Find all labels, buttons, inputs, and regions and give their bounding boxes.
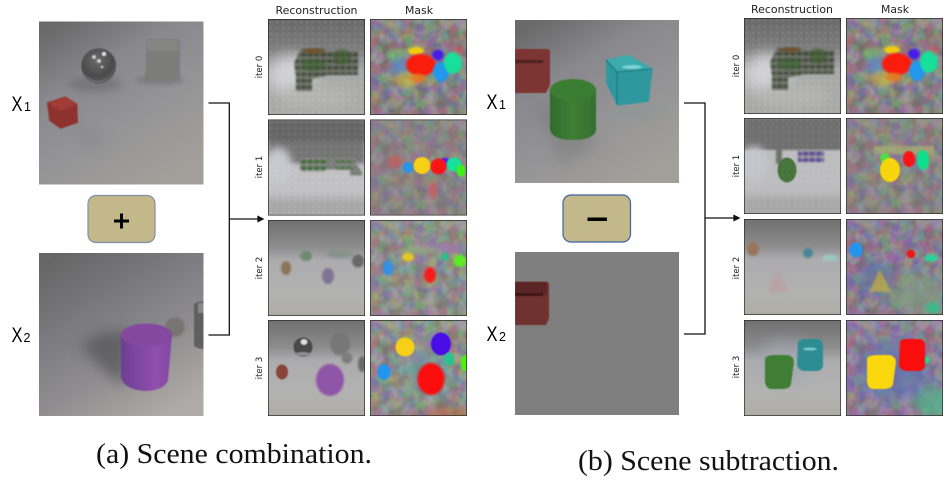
label: iter 1: iter 1	[255, 156, 265, 178]
label: X1: 1	[24, 100, 31, 114]
mask: iter 1	[846, 118, 943, 214]
label: X1: X	[12, 93, 22, 116]
image: X2 scene with purple cylinder	[39, 253, 204, 416]
heading: Mask column: Mask	[881, 4, 910, 16]
arrow: bracket combining X1 and X2 into iterations	[684, 103, 739, 334]
reconstruction: iter 0	[268, 19, 365, 115]
operator: minus button	[563, 195, 630, 242]
reconstruction: iter 2	[744, 219, 841, 315]
mask: iter 2	[370, 220, 467, 316]
heading: Reconstruction column: Reconstruction	[276, 5, 358, 17]
label: iter 3: iter 3	[255, 357, 265, 379]
label: iter 2: iter 2	[255, 257, 265, 279]
label: X2: 2	[24, 331, 30, 345]
label: X2: X	[12, 324, 22, 347]
label: X2: 2	[499, 330, 506, 344]
reconstruction: iter 2	[268, 220, 365, 316]
mask: iter 2	[846, 219, 943, 315]
mask: iter 3	[370, 320, 467, 416]
label: X1: X	[486, 91, 498, 114]
mask: iter 1	[370, 120, 467, 216]
reconstruction: iter 1	[744, 118, 841, 214]
mask: iter 3	[846, 320, 943, 416]
arrow: bracket combining X1 and X2 into iterations	[208, 103, 263, 335]
label: iter 3: iter 3	[732, 356, 742, 378]
caption: scene combination: (a) Scene combination.	[96, 439, 372, 470]
label: iter 0: iter 0	[732, 55, 742, 77]
reconstruction: iter 1	[268, 120, 365, 216]
reconstruction: iter 3	[744, 320, 841, 416]
label: iter 0: iter 0	[255, 56, 265, 78]
heading: Reconstruction column: Reconstruction	[751, 4, 833, 16]
reconstruction: iter 3	[268, 320, 365, 416]
operator: plus button	[88, 196, 155, 242]
panel: scene combination	[12, 5, 476, 470]
reconstruction: iter 0	[744, 18, 841, 114]
label: X1: 1	[499, 98, 506, 112]
label: iter 2: iter 2	[732, 257, 742, 279]
mask: iter 0	[370, 19, 467, 115]
image: X2 scene with red cube on grey	[515, 252, 679, 415]
panel: scene subtraction	[486, 4, 950, 477]
image: X1 scene with red cube, green cylinder and cyan cube	[515, 20, 679, 183]
mask: iter 0	[846, 18, 943, 114]
caption: scene subtraction: (b) Scene subtraction.	[578, 446, 839, 477]
heading: Mask column: Mask	[405, 5, 434, 17]
label: iter 1: iter 1	[732, 155, 742, 177]
label: X2: X	[486, 323, 498, 346]
image: X1 scene with sphere, grey cube and red cube	[39, 22, 204, 184]
